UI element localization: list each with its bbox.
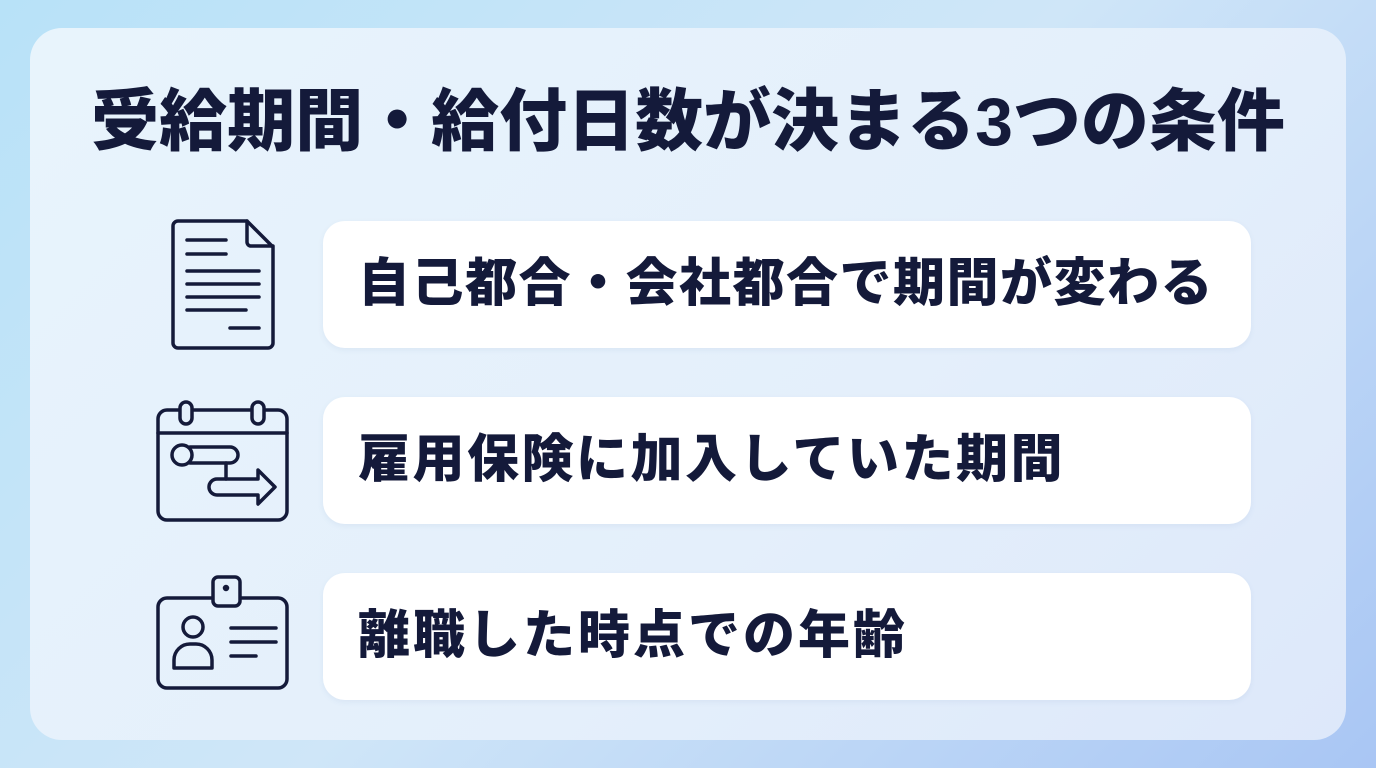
icon: calendar timeline	[158, 402, 287, 520]
card: condition 2	[323, 397, 1251, 524]
icon: document	[173, 221, 273, 348]
card: condition 3: 離職した時点での年齢	[358, 607, 908, 665]
card: condition 1: 自己都合・会社都合で期間が変わる	[358, 255, 1214, 313]
card: condition 2: 雇用保険に加入していた期間	[358, 431, 1065, 489]
card: condition 1	[323, 221, 1251, 348]
icon: ID badge	[158, 577, 287, 688]
title: 受給期間・給付日数が決まる3つの条件	[91, 84, 1285, 160]
card: condition 3	[323, 573, 1251, 700]
